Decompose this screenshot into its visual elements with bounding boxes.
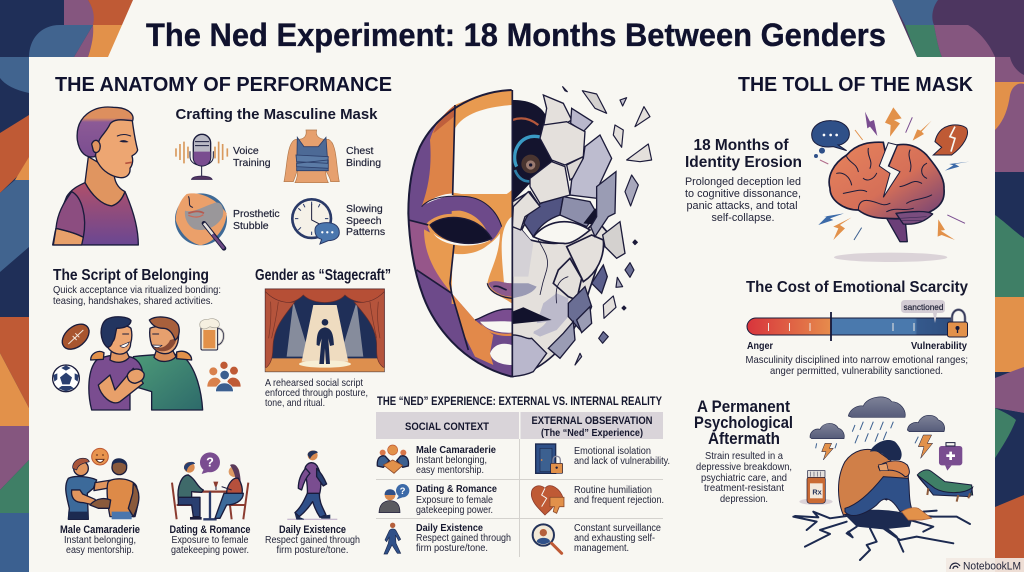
heading: script of belonging: The Script of Belonging	[53, 267, 209, 284]
heading: psychological aftermath: A Permanent	[697, 398, 790, 416]
table header: social context	[376, 412, 519, 439]
illustration: cracked brain with bolts	[812, 107, 969, 262]
description: aftermath: depressive breakdown,	[696, 461, 792, 473]
text: routine humiliation: Routine humiliation	[574, 485, 652, 496]
flying mask fragments	[563, 87, 652, 365]
icon: handshake	[377, 445, 409, 473]
description: identity erosion: Prolonged deception led	[685, 176, 801, 188]
table: the Ned experience	[376, 396, 670, 557]
illustration: seated figure under storm clouds: Rx	[812, 487, 823, 496]
scenario: daily existence	[265, 450, 360, 556]
text: dating and romance: Exposure to female	[416, 495, 493, 506]
heading: identity erosion: Identity Erosion	[685, 154, 802, 171]
scenario: dating and romance	[170, 452, 250, 556]
text: daily existence: Respect gained through	[416, 533, 511, 544]
text: daily existence: Daily Existence	[416, 522, 483, 534]
caption: rehearsed social script: enforced through posture,	[265, 387, 368, 399]
label: slowing speech patterns: Slowing	[346, 203, 383, 215]
text: male camaraderie: easy mentorship.	[416, 465, 484, 476]
section heading: anatomy of performance: THE ANATOMY OF PERFORMANCE	[55, 74, 392, 96]
label: slowing speech patterns: Patterns	[346, 226, 385, 238]
text: constant surveillance: and exhausting self-	[574, 533, 655, 544]
heading: crafting the masculine mask: Crafting the Masculine Mask	[176, 106, 378, 123]
caption: rehearsed social script: A rehearsed social script	[265, 377, 363, 389]
illustration: seated figure under storm clouds	[793, 397, 973, 560]
panel: cost of emotional scarcity	[746, 279, 968, 377]
row: dating and romance	[379, 483, 497, 516]
text: dating and romance: Dating & Romance	[416, 483, 497, 495]
section heading: toll of the mask: THE TOLL OF THE MASK	[738, 74, 974, 96]
illustration: walking man	[287, 450, 337, 519]
mask left half: painted face	[408, 90, 512, 377]
label: daily existence: Daily Existence	[279, 524, 346, 536]
label: voice training: Training	[233, 157, 271, 169]
icon: stubble and applicator	[175, 193, 227, 248]
heading: identity erosion: 18 Months of	[694, 137, 789, 154]
icon: locked door	[536, 444, 563, 473]
description: identity erosion: to cognitive dissonance,	[685, 188, 801, 200]
item: slowing speech patterns	[292, 199, 385, 244]
table header: external observation: (The “Ned” Experience)	[541, 427, 643, 439]
title: The Ned Experiment: 18 Months Between Genders	[146, 17, 886, 53]
scale labels: Anger	[747, 341, 773, 352]
label: prosthetic stubble: Stubble	[233, 220, 269, 232]
description: emotional scarcity: anger permitted, vulnerability sanctioned.	[770, 365, 943, 377]
icon: torso with binding	[284, 130, 339, 183]
description: emotional scarcity: Masculinity disciplined into narrow emotional ranges;	[746, 354, 968, 366]
table title: THE “NED” EXPERIENCE: EXTERNAL VS. INTERNAL REALITY	[377, 396, 662, 408]
text: male camaraderie: Male Camaraderie	[416, 444, 496, 456]
item: prosthetic stubble	[175, 193, 280, 248]
callout: sanctioned: sanctioned	[904, 302, 944, 312]
heading: psychological aftermath: Psychological	[694, 414, 793, 432]
description: identity erosion: self-collapse.	[712, 212, 774, 224]
label: male camaraderie: Instant belonging,	[64, 535, 136, 546]
heading: psychological aftermath: Aftermath	[708, 430, 780, 448]
scenario: male camaraderie	[60, 448, 140, 556]
callout: sanctioned	[901, 300, 945, 323]
label: daily existence: firm posture/tone.	[276, 545, 348, 556]
illustration: two men bonding	[89, 317, 203, 410]
panel: identity erosion	[685, 107, 969, 262]
label: voice training: Voice	[233, 145, 259, 157]
label: male camaraderie: Male Camaraderie	[60, 524, 140, 536]
icon: clock and speech bubble	[292, 199, 339, 244]
label: male camaraderie: easy mentorship.	[66, 545, 134, 556]
table header: external observation	[520, 412, 663, 439]
illustration: two men shaking hands	[66, 448, 139, 519]
description: aftermath: treatment-resistant	[704, 482, 784, 494]
illustration: split fractured mask	[408, 87, 652, 377]
icon: broken heart and thumbs down	[531, 486, 564, 515]
panel: script of belonging	[53, 267, 241, 410]
heading: emotional scarcity: The Cost of Emotional Scarcity	[746, 279, 968, 296]
illustration: couple at table: ?	[206, 456, 214, 470]
text: emotional isolation: and lack of vulnerability.	[574, 456, 670, 467]
label: prosthetic stubble: Prosthetic	[233, 208, 280, 220]
text: daily existence: firm posture/tone.	[416, 543, 488, 554]
row: dating and romance observation	[531, 485, 664, 515]
text: emotional isolation: Emotional isolation	[574, 446, 651, 457]
icon: soccer ball	[53, 365, 79, 392]
icon: american football	[57, 319, 94, 354]
label: dating and romance: Exposure to female	[172, 535, 249, 546]
icon: group of people	[207, 362, 241, 392]
panel: gender as stagecraft	[255, 267, 391, 409]
label: chest binding: Binding	[346, 157, 381, 169]
badge: NotebookLM	[946, 558, 1024, 572]
text: male camaraderie: Instant belonging,	[416, 455, 487, 466]
icon: beer mug	[200, 319, 224, 350]
heading: gender as stagecraft: Gender as “Stagecraft”	[255, 267, 391, 284]
icon: padlock	[948, 310, 968, 337]
table header: external observation: EXTERNAL OBSERVATION	[532, 415, 653, 427]
text: routine humiliation: and frequent rejection.	[574, 495, 664, 506]
panel: psychological aftermath	[694, 397, 973, 560]
description: identity erosion: panic attacks, and total	[686, 200, 798, 212]
gauge: anger to vulnerability range	[747, 300, 968, 341]
description: aftermath: psychiatric care, and	[701, 472, 787, 484]
table header: social context: SOCIAL CONTEXT	[405, 421, 489, 433]
row: daily existence observation	[533, 523, 661, 554]
description: ritualized bonding: Quick acceptance via ritualized bonding:	[53, 284, 221, 296]
description: ritualized bonding: teasing, handshakes, shared activities.	[53, 295, 213, 307]
text: constant surveillance: management.	[574, 543, 629, 554]
icon: microphone	[176, 134, 227, 179]
label: chest binding: Chest	[346, 145, 374, 157]
scale labels: Vulnerability	[911, 341, 967, 352]
label: daily existence: Respect gained through	[265, 535, 360, 546]
label: dating and romance: gatekeeping power.	[171, 545, 249, 556]
label: dating and romance: Dating & Romance	[170, 524, 250, 536]
row: male camaraderie	[377, 444, 496, 476]
description: aftermath: Strain resulted in a	[705, 450, 783, 462]
text: dating and romance: gatekeeping power.	[416, 505, 493, 516]
text: constant surveillance: Constant surveillance	[574, 523, 661, 534]
icon: person with question bubble: ?	[400, 486, 406, 496]
caption: rehearsed social script: tone, and ritual.	[265, 397, 325, 409]
illustration: theatre stage with spotlight	[265, 289, 384, 372]
item: voice training	[176, 134, 271, 179]
label: slowing speech patterns: Speech	[346, 215, 382, 227]
icon: magnifying glass over person	[533, 524, 562, 553]
mask right half: cracked stone and hidden eye	[512, 95, 625, 377]
description: aftermath: depression.	[720, 493, 768, 505]
icon: walking figure	[384, 523, 401, 554]
item: chest binding	[284, 130, 381, 183]
row: daily existence	[384, 522, 511, 554]
row: male camaraderie observation	[536, 444, 670, 473]
illustration: woman in profile	[53, 107, 138, 245]
